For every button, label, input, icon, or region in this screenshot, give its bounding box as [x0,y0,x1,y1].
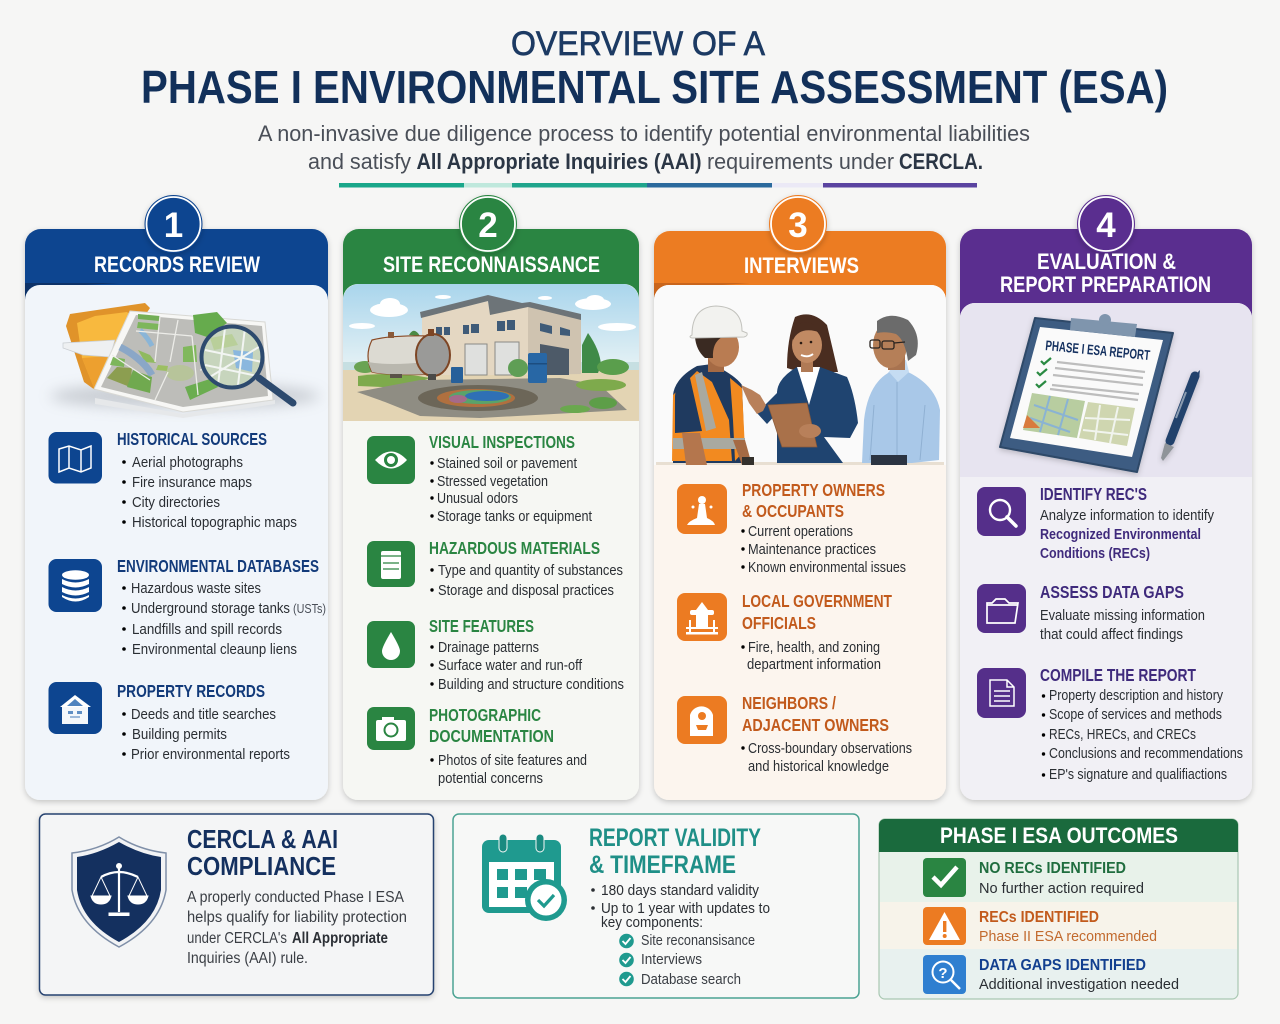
heading: CERCLA & AAI [187,824,338,854]
card frame [654,231,946,800]
icon: house [48,682,102,734]
step heading: EVALUATION & [1037,249,1176,274]
bullets: Landfills and spill records [132,622,282,638]
outcome text [979,909,1157,945]
icon: camera [367,707,415,750]
bullets: EP's signature and qualifiactions [1049,767,1227,783]
bullets: Storage and disposal practices [438,583,614,599]
step heading: RECORDS REVIEW [94,252,261,277]
illustration: clipboard report and pen: PHASE I ESA REPORT [1045,337,1151,363]
bullets: Stained soil or pavement [437,456,577,472]
icon: search question: ? [938,965,948,982]
section heading: & OCCUPANTS [742,501,844,521]
bullet [430,753,587,787]
section heading: OFFICIALS [742,613,816,633]
body text: Evaluate missing information [1040,608,1205,624]
icon: database [48,559,102,612]
bullets: (USTs) [293,602,326,616]
step badge 3 [769,195,827,253]
icon: map [48,432,102,484]
heading [589,824,761,879]
section heading: COMPILE THE REPORT [1040,665,1196,685]
icon: eye [367,436,415,484]
bullets: Up to 1 year with updates to [601,900,770,917]
body text: Recognized Environmental [1040,527,1201,543]
bullet: department information [747,657,881,673]
section heading: ENVIRONMENTAL DATABASES [117,556,319,576]
bullets: Property description and history [1049,688,1224,704]
panel: step 1 records review [25,195,328,800]
body text: Analyze information to identify [1040,508,1215,524]
bullets: Aerial photographs [132,455,243,471]
body text: under CERCLA's [187,930,287,947]
subtitle: requirements under [707,149,894,174]
bullets: City directories [132,495,220,511]
step heading: INTERVIEWS [744,253,859,278]
body text: All Appropriate [292,930,388,947]
subtitle: and satisfy [308,149,412,174]
body text [1040,608,1205,643]
bullets: Building permits [132,727,227,743]
step badge 1: 1 [164,206,183,245]
bullets: Known environmental issues [748,560,906,576]
bullets: Storage tanks or equipment [437,509,592,525]
bullets [430,456,592,525]
card frame [343,229,639,800]
title block [141,25,1168,188]
bullets: Stressed vegetation [437,474,548,490]
section heading: VISUAL INSPECTIONS [429,432,575,452]
header bar [879,819,1238,852]
heading: REPORT VALIDITY [589,824,761,852]
section heading: PROPERTY RECORDS [117,681,265,701]
step badge 3: 3 [788,206,808,245]
checklist: Interviews [641,952,702,968]
section heading: PHOTOGRAPHIC [429,705,541,725]
card frame [960,229,1252,800]
panel: step 4 evaluation and report preparation [960,195,1252,800]
bullets: Surface water and run-off [438,658,583,674]
panel frame [40,814,434,995]
outcome text: DATA GAPS IDENTIFIED [979,957,1146,974]
step badge 2: 2 [478,206,498,245]
body text: Conditions (RECs) [1040,546,1150,562]
section heading: LOCAL GOVERNMENT [742,591,892,611]
body text: that could affect findings [1040,627,1183,643]
icon: neighbor house [677,696,727,744]
panel: report validity and timeframe [453,814,859,998]
outcome text: NO RECs IDENTIFIED [979,860,1126,877]
panel: step 3 interviews [654,195,946,800]
outcome: data gaps identified [923,955,1179,994]
section heading [742,693,889,735]
outcome: no RECs identified [923,858,1144,897]
step heading [1000,249,1211,297]
icon: water drop [367,621,415,668]
bullets: Current operations [748,524,853,540]
outcome text: RECs IDENTIFIED [979,909,1099,926]
section heading: ADJACENT OWNERS [742,715,889,735]
checklist: Database search [641,972,741,988]
bullet: Cross-boundary observations [748,741,912,757]
outcome text: No further action required [979,880,1144,897]
bullets: Type and quantity of substances [438,563,623,579]
bullets: Building and structure conditions [438,677,624,693]
section: visual inspections [367,432,592,525]
bullets: RECs, HRECs, and CRECs [1049,727,1196,743]
step badge 4: 4 [1096,206,1116,245]
outcome text: Additional investigation needed [979,976,1179,993]
bullets: key components: [601,914,703,931]
section heading: HAZARDOUS MATERIALS [429,538,600,558]
step heading: SITE RECONNAISSANCE [383,252,600,277]
section heading: PROPERTY OWNERS [742,480,885,500]
icon: document [977,668,1026,718]
outcome text [979,860,1144,897]
outcome: RECs identified [923,907,1157,945]
section: neighbors / adjacent owners [677,693,912,775]
bullets: Conclusions and recommendations [1049,746,1243,762]
section heading [742,591,892,633]
subtitle: CERCLA. [899,149,983,174]
bullets [122,581,326,658]
step badge 2 [459,195,517,253]
section: local government officials [677,591,892,673]
outcome text: Phase II ESA recommended [979,928,1157,945]
illustration: three people talking [656,306,944,465]
bullets: Environmental cleaunp liens [132,642,297,658]
icon: check [923,858,966,897]
bullet [741,640,881,673]
subtitle [258,121,1030,174]
panel body and rows [879,819,1238,999]
section heading: HISTORICAL SOURCES [117,429,267,449]
bullets: Fire insurance maps [132,475,252,491]
panel: phase I ESA outcomes [879,819,1238,999]
icon: warning [923,907,966,945]
icon: magnifier [977,487,1026,536]
bullet: Photos of site features and [438,753,587,769]
bullets: Hazardous waste sites [131,581,261,597]
section heading: SITE FEATURES [429,616,534,636]
person: man with glasses in blue shirt [862,316,940,465]
illustration: clipboard report and pen [1000,314,1200,472]
panel frame [453,814,859,998]
bullet: potential concerns [438,771,543,787]
icon: calendar with check [482,834,567,921]
bullets: 180 days standard validity [601,882,759,899]
bullets: Underground storage tanks [131,601,290,617]
section: hazardous materials [367,538,623,599]
icon: government building [677,593,727,641]
panel: CERCLA and AAI compliance [40,814,434,995]
panel: step 2 site reconnaissance [343,195,639,800]
header bar: PHASE I ESA OUTCOMES [940,823,1178,848]
bullets: Scope of services and methods [1049,707,1222,723]
section: photographic documentation [367,705,587,787]
title: overview of a: OVERVIEW OF A [511,25,765,63]
illustration: folder, map and magnifier [50,303,320,418]
bullets [430,640,624,693]
section: environmental databases [48,556,326,658]
section: property owners & occupants [677,480,906,576]
bullets: Maintenance practices [748,542,876,558]
outcome text [979,957,1179,993]
body text: A properly conducted Phase I ESA [187,889,405,906]
illustration: site with building, tank, drums and oil stain [343,284,639,421]
icon: drum [367,541,415,587]
icon: search question [923,955,966,994]
person: worker in hard hat and vest [672,306,754,465]
step badge 4 [1077,195,1135,253]
step badge 1 [144,195,202,253]
heading: COMPLIANCE [187,851,336,881]
bullets: Prior environmental reports [131,747,290,763]
bullets: Historical topographic maps [132,515,297,531]
card frame [25,229,328,800]
icon: folder [977,584,1026,633]
section: identify recs [977,484,1215,562]
body text [187,889,407,967]
subtitle: All Appropriate Inquiries (AAI) [416,149,702,174]
bullets [122,455,297,531]
step heading: REPORT PREPARATION [1000,272,1211,297]
icon: person [677,484,727,534]
body text [1040,508,1215,562]
bullet: Fire, health, and zoning [748,640,880,656]
pen [1161,370,1200,461]
icon: shield with scales [72,837,166,947]
section: assess data gaps [977,582,1205,643]
section: site features [367,616,624,693]
checklist: Site reconansisance [641,933,755,949]
subtitle: A non-invasive due diligence process to identify potential environmental liabilities [258,121,1030,146]
heading [187,824,338,881]
section heading: NEIGHBORS / [742,693,836,713]
section: compile the report [977,665,1243,783]
bullet [741,741,912,775]
gradient divider bar [339,183,977,188]
bullets [430,563,623,599]
section heading [429,705,554,746]
section heading [742,480,885,521]
section: property records [48,681,290,763]
person: woman in blazer with clipboard [741,314,858,463]
section heading: IDENTIFY REC'S [1040,484,1147,504]
bullets: Deeds and title searches [131,707,276,723]
body text: Inquiries (AAI) rule. [187,950,308,967]
body text: helps qualify for liability protection [187,909,407,926]
bullets: Unusual odors [437,491,518,507]
bullets [741,524,906,576]
bullets [591,882,770,931]
section heading: DOCUMENTATION [429,726,554,746]
bullets [122,707,290,763]
heading: & TIMEFRAME [589,851,736,879]
bullet: and historical knowledge [748,759,889,775]
section heading: ASSESS DATA GAPS [1040,582,1184,602]
section: historical sources [48,429,297,531]
bullets: Drainage patterns [438,640,539,656]
bullets [1042,688,1243,783]
checklist [619,933,755,988]
